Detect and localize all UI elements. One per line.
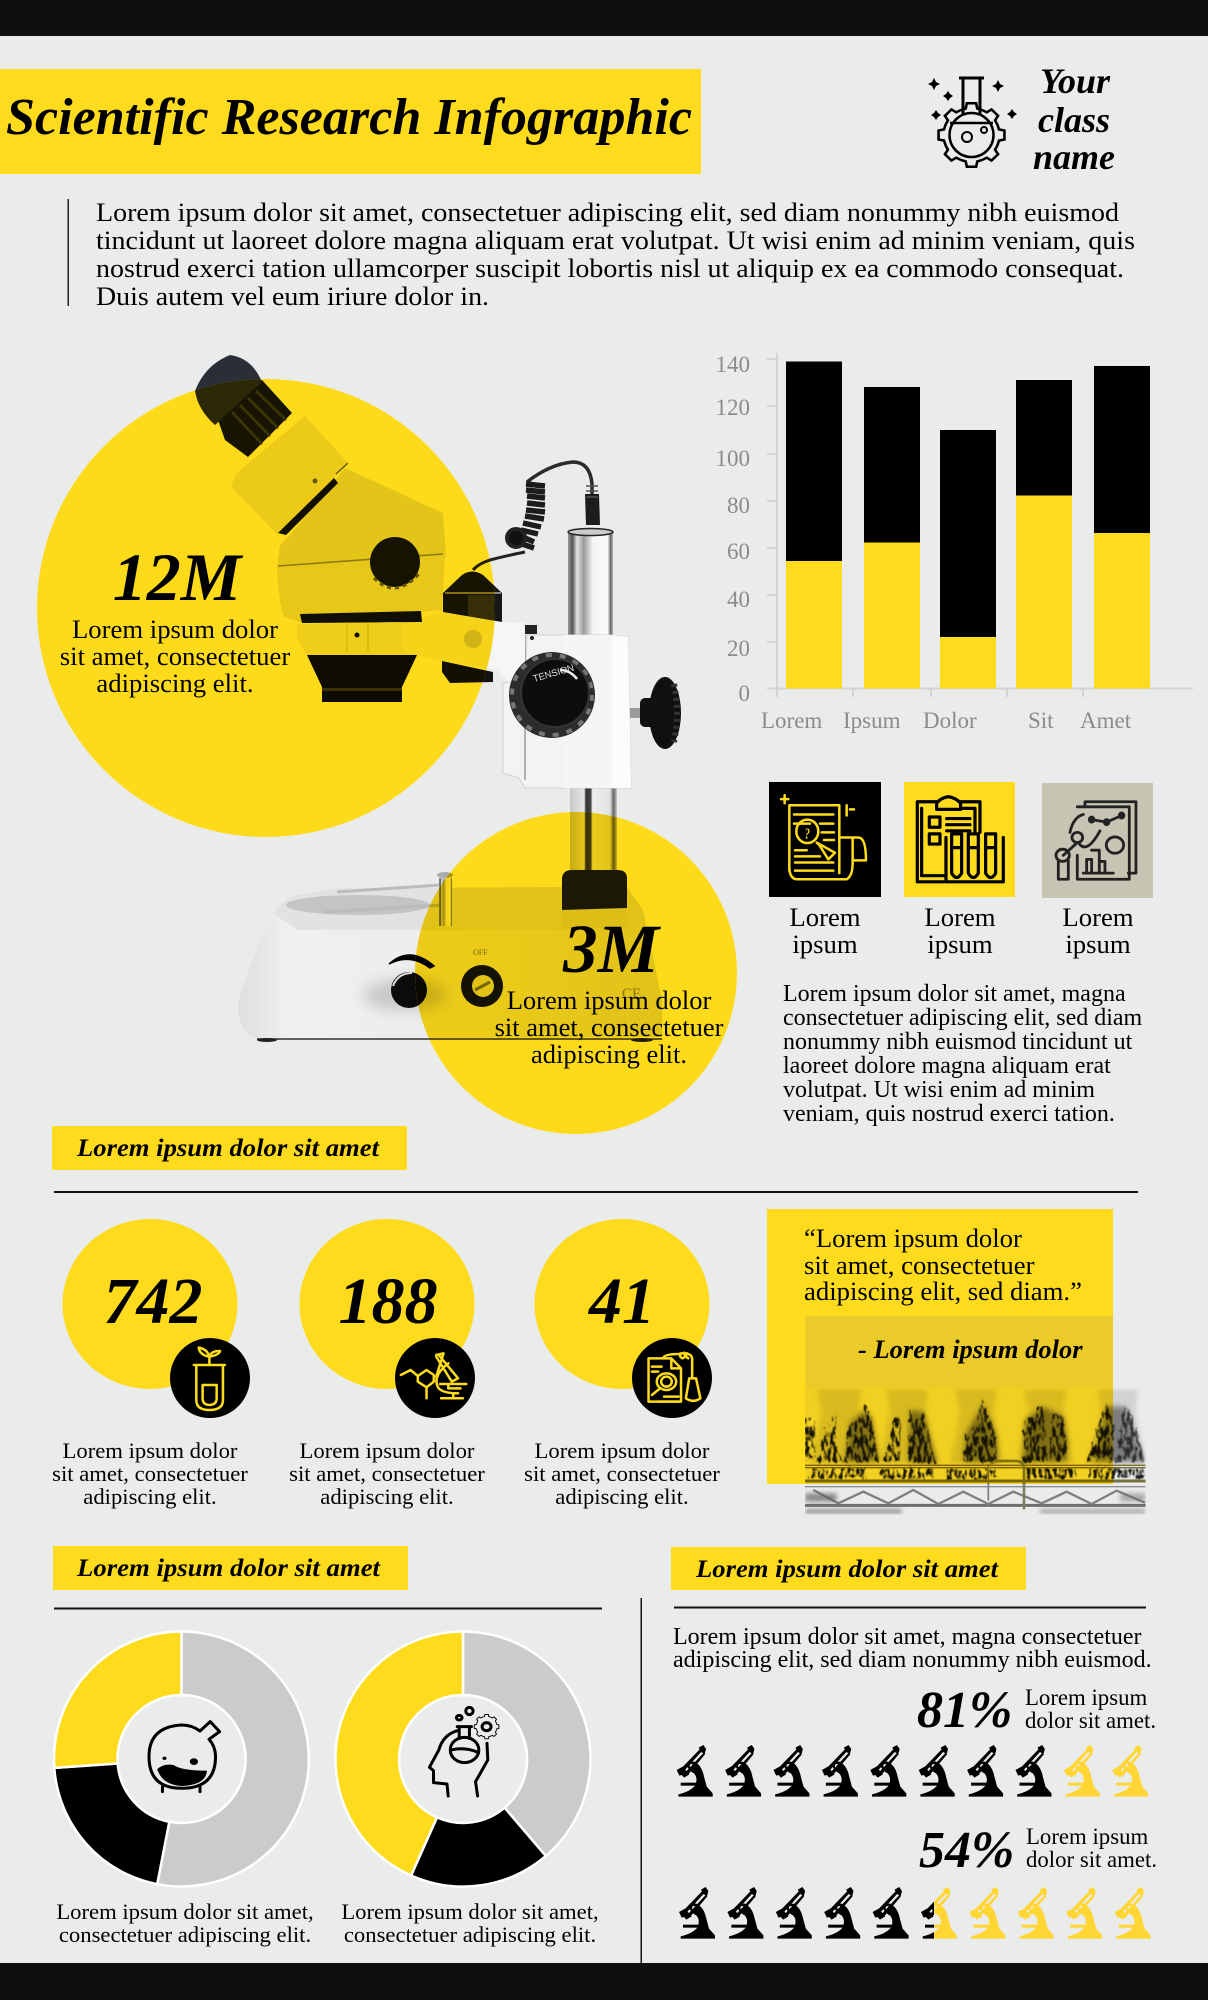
right column paragraph: volutpat. Ut wisi enim ad minim <box>783 1077 1095 1103</box>
stat captions <box>52 1438 720 1509</box>
donut captions: consectetuer adipiscing elit. <box>59 1922 311 1947</box>
x axis labels: Ipsum <box>843 708 901 733</box>
section rule left <box>54 1608 602 1610</box>
class name text: Your <box>1040 61 1111 101</box>
y axis labels: 20 <box>727 636 750 661</box>
right column paragraph: laoreet dolore magna aliquam erat <box>783 1053 1111 1079</box>
class name text: name <box>1033 137 1115 177</box>
microscope photo with yellow circles <box>37 355 737 1134</box>
right column paragraph: Lorem ipsum dolor sit amet, magna <box>783 981 1126 1007</box>
x axis labels <box>761 708 1132 733</box>
donut captions: Lorem ipsum dolor sit amet, <box>56 1899 314 1924</box>
microscope tinted inside circles <box>195 355 681 1042</box>
microscope greyscale <box>195 355 681 1042</box>
pictogram row 81 percent <box>677 1745 1148 1797</box>
y axis labels: 60 <box>727 539 750 564</box>
stat 54 percent: 54% <box>919 1822 1014 1879</box>
stat 54 percent <box>919 1822 1157 1879</box>
stat 81 percent <box>917 1682 1156 1739</box>
stat captions: adipiscing elit. <box>320 1484 454 1509</box>
quote panel <box>767 1209 1146 1513</box>
stat captions: Lorem ipsum dolor <box>535 1438 710 1463</box>
stat captions: adipiscing elit. <box>555 1484 689 1509</box>
photo yellow tint <box>805 1388 1113 1484</box>
stat captions: Lorem ipsum dolor <box>300 1438 475 1463</box>
intro divider <box>68 199 69 306</box>
stat captions: Lorem ipsum dolor <box>63 1438 238 1463</box>
section rule right <box>674 1606 1146 1608</box>
icon: document and flask <box>632 1338 712 1418</box>
pictogram row 54 percent <box>679 1887 1151 1939</box>
intro paragraph <box>96 197 1135 311</box>
right column paragraph: consectetuer adipiscing elit, sed diam <box>783 1005 1143 1031</box>
icon tile labels: ipsum <box>927 929 993 959</box>
stat 81 percent: dolor sit amet. <box>1025 1708 1156 1733</box>
section heading 3 <box>671 1547 1026 1590</box>
right column paragraph: nonummy nibh euismod tincidunt ut <box>783 1029 1133 1055</box>
stat 54 percent: Lorem ipsum <box>1026 1824 1148 1849</box>
icon tile labels: ipsum <box>1065 929 1131 959</box>
icon: molecule microscope <box>395 1338 475 1418</box>
y axis labels: 140 <box>716 352 750 377</box>
stat 3M: adipiscing elit. <box>531 1039 687 1069</box>
class name text: class <box>1038 100 1110 140</box>
icon tile: research document: ? <box>805 825 810 843</box>
stat circle 742: 742 <box>104 1265 202 1338</box>
stat circle 188: 188 <box>338 1265 438 1338</box>
bar: Sit <box>1016 380 1072 688</box>
y axis labels: 0 <box>738 681 750 706</box>
stat 12M: sit amet, consectetuer <box>60 641 290 671</box>
section heading 1: Lorem ipsum dolor sit amet <box>76 1133 380 1162</box>
icon: head with flask and gear <box>429 1707 499 1796</box>
quote text: adipiscing elit, sed diam.” <box>804 1276 1082 1306</box>
donut captions: Lorem ipsum dolor sit amet, <box>341 1899 599 1924</box>
stat 12M <box>60 539 290 698</box>
icon tile labels: ipsum <box>792 929 858 959</box>
stat captions: sit amet, consectetuer <box>524 1461 720 1486</box>
quote text: “Lorem ipsum dolor <box>804 1223 1022 1253</box>
stat 81 percent: Lorem ipsum <box>1025 1685 1147 1710</box>
right column paragraph <box>783 981 1143 1127</box>
section heading 2 <box>53 1546 408 1590</box>
vertical column divider <box>640 1598 642 1982</box>
donut chart 2 <box>335 1632 591 1887</box>
stat captions: adipiscing elit. <box>83 1484 217 1509</box>
y axis labels: 120 <box>716 395 750 420</box>
quote attribution: - Lorem ipsum dolor <box>858 1334 1083 1364</box>
x axis labels: Amet <box>1080 708 1132 733</box>
bar: Ipsum <box>864 387 920 688</box>
bar: Dolor <box>940 430 996 688</box>
icon tile labels: Lorem <box>924 902 996 932</box>
top black bar <box>0 0 1208 36</box>
x axis labels: Sit <box>1028 708 1054 733</box>
icon tile labels <box>789 902 1134 959</box>
photo: lab flasks <box>805 1388 1146 1513</box>
right section paragraph: adipiscing elit, sed diam nonummy nibh euismod. <box>673 1647 1152 1673</box>
stat 3M: Lorem ipsum dolor <box>507 985 711 1015</box>
stat circle 41: 41 <box>587 1265 655 1338</box>
x axis labels: Lorem <box>761 708 822 733</box>
y axis labels: 80 <box>727 493 750 518</box>
section heading 3: Lorem ipsum dolor sit amet <box>695 1554 999 1583</box>
stat captions: sit amet, consectetuer <box>52 1461 248 1486</box>
title banner <box>0 69 701 174</box>
class name text <box>1033 61 1115 177</box>
right column paragraph: veniam, quis nostrud exerci tation. <box>783 1101 1115 1127</box>
stat 3M <box>495 911 724 1069</box>
stacked bar chart <box>716 352 1193 733</box>
bar: Amet <box>1094 366 1150 688</box>
icon tile: research document <box>769 782 881 897</box>
y axis labels <box>716 352 750 706</box>
quote text: sit amet, consectetuer <box>804 1250 1035 1280</box>
photo top shade <box>805 1316 1113 1388</box>
stat 12M: 12M <box>113 539 244 615</box>
y axis labels: 100 <box>716 446 750 471</box>
stat 3M: sit amet, consectetuer <box>495 1012 724 1042</box>
section heading 2: Lorem ipsum dolor sit amet <box>76 1553 381 1582</box>
stat circle 41 <box>534 1219 712 1418</box>
chart axes <box>767 353 1193 697</box>
quote text <box>804 1223 1082 1306</box>
icon tile labels: Lorem <box>1062 902 1134 932</box>
title banner: Scientific Research Infographic <box>6 89 692 146</box>
x axis labels: Dolor <box>923 708 977 733</box>
intro paragraph: nostrud exerci tation ullamcorper suscipit lobortis nisl ut aliquip ex ea commodo consequat. <box>96 253 1124 283</box>
stat 54 percent: dolor sit amet. <box>1026 1847 1157 1872</box>
icon: sprout test tube <box>170 1338 250 1418</box>
stat 12M: Lorem ipsum dolor <box>72 614 278 644</box>
right section paragraph <box>673 1624 1152 1673</box>
section heading 1 <box>52 1126 407 1170</box>
intro paragraph: Lorem ipsum dolor sit amet, consectetuer adipiscing elit, sed diam nonummy nibh euismod <box>96 197 1120 227</box>
stat circle 742 <box>62 1219 250 1418</box>
yellow circle small <box>415 812 737 1134</box>
icon: round flask with liquid <box>149 1722 220 1792</box>
right section paragraph: Lorem ipsum dolor sit amet, magna consectetuer <box>673 1624 1142 1650</box>
donut chart 1 <box>54 1632 309 1886</box>
icon tile labels: Lorem <box>789 902 861 932</box>
icon: flask in gear logo <box>928 78 1017 167</box>
bar: Lorem <box>786 362 842 688</box>
intro paragraph: tincidunt ut laoreet dolore magna aliquam erat volutpat. Ut wisi enim ad minim veniam, quis <box>96 225 1135 255</box>
footer black bar <box>0 1963 1208 2000</box>
stat captions: sit amet, consectetuer <box>289 1461 485 1486</box>
yellow circle large <box>37 379 495 837</box>
donut captions: consectetuer adipiscing elit. <box>344 1922 596 1947</box>
y axis labels: 40 <box>727 587 750 612</box>
stat circle 188 <box>300 1219 475 1418</box>
stat 3M: 3M <box>562 911 662 987</box>
stat 81 percent: 81% <box>917 1682 1012 1739</box>
icon tile: clipboard and test tubes <box>904 782 1015 897</box>
stat 12M: adipiscing elit. <box>96 668 254 698</box>
donut captions <box>56 1899 599 1947</box>
icon tile: analysis chart <box>1042 783 1153 898</box>
section rule <box>54 1191 1138 1193</box>
intro paragraph: Duis autem vel eum iriure dolor in. <box>96 281 489 311</box>
